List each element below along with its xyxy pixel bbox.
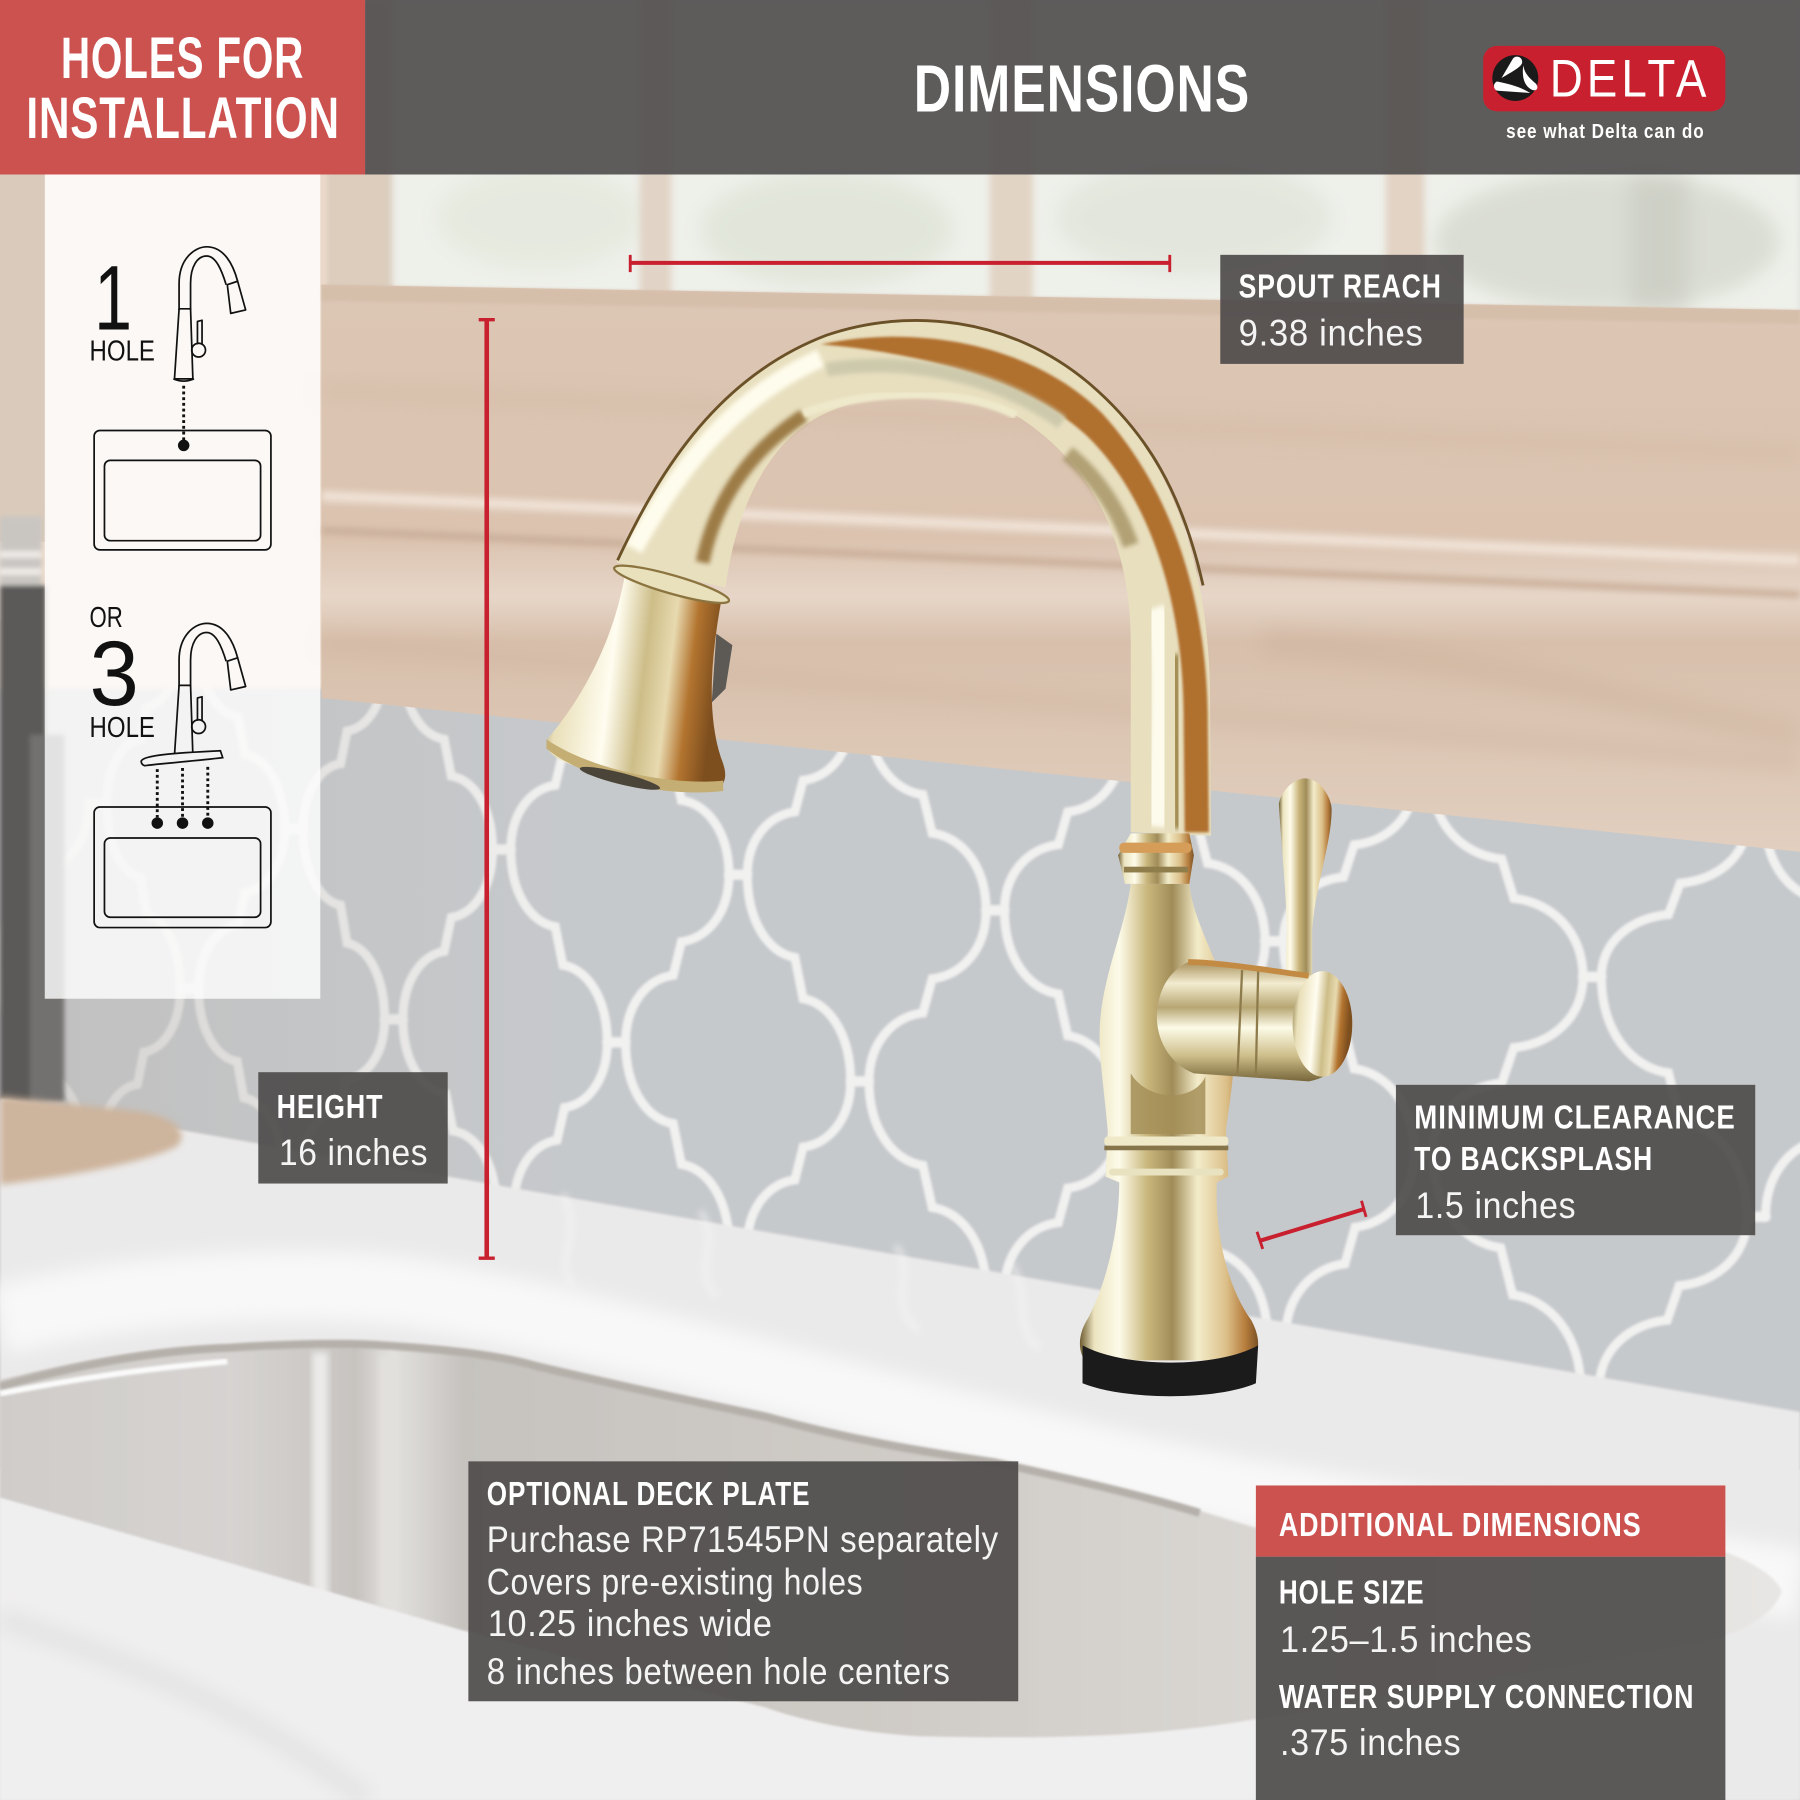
faucet body bbox=[1080, 884, 1258, 1360]
tile backsplash bbox=[0, 620, 1800, 1469]
logo: delta bbox=[1483, 46, 1725, 143]
front countertop bbox=[0, 1498, 1256, 1800]
callout: height: HEIGHT bbox=[277, 1089, 383, 1126]
callout: optional deck plate: Covers pre-existing holes bbox=[487, 1562, 863, 1603]
title: dimensions: DIMENSIONS bbox=[914, 52, 1250, 126]
left wall and window frame bbox=[0, 0, 327, 689]
panel: additional dimensions: .375 inches bbox=[1280, 1722, 1461, 1763]
callout: height: 16 inches bbox=[279, 1132, 428, 1173]
callout: spout reach bbox=[1220, 255, 1464, 364]
wooden cutting board bbox=[0, 1096, 181, 1185]
panel: holes for installation heading: HOLES FOR bbox=[61, 26, 304, 91]
callout: minimum clearance: MINIMUM CLEARANCE bbox=[1414, 1099, 1736, 1136]
panel: additional dimensions: WATER SUPPLY CONNECTION bbox=[1279, 1679, 1694, 1716]
additional dimensions heading: ADDITIONAL DIMENSIONS bbox=[1279, 1507, 1642, 1544]
icon: three hole sink bbox=[94, 767, 271, 928]
callout: minimum clearance: TO BACKSPLASH bbox=[1414, 1141, 1653, 1178]
spray head trigger bbox=[712, 634, 732, 703]
callout: height bbox=[258, 1072, 448, 1184]
marble countertop bbox=[0, 1099, 1800, 1800]
pull-down spray head bbox=[546, 559, 731, 794]
callout: optional deck plate: 8 inches between hole centers bbox=[487, 1651, 951, 1692]
handle lever bbox=[1279, 778, 1332, 973]
icon: delta logo petals bbox=[1494, 57, 1537, 93]
logo: delta: see what Delta can do bbox=[1506, 120, 1705, 143]
callout: spout reach: 9.38 inches bbox=[1239, 313, 1423, 354]
faint tile reflection on counter bbox=[562, 1194, 1039, 1349]
header bar bbox=[365, 0, 1800, 174]
callout: optional deck plate: Purchase RP71545PN separately bbox=[487, 1519, 999, 1560]
collar rings bbox=[1104, 833, 1228, 1176]
panel: hole diagrams bbox=[45, 174, 320, 999]
rounded counter edge above sink bbox=[0, 1286, 1800, 1584]
callout: spout reach: SPOUT REACH bbox=[1239, 268, 1442, 305]
callout: optional deck plate bbox=[468, 1461, 1018, 1701]
or 3 hole label: OR bbox=[90, 602, 123, 634]
icon: single hole faucet bbox=[173, 247, 246, 381]
faucet bbox=[546, 320, 1352, 1396]
numeral 1 hole: HOLE bbox=[90, 335, 155, 367]
icon: one hole sink bbox=[94, 386, 271, 550]
logo: delta: DELTA bbox=[1550, 49, 1710, 108]
panel: holes for installation heading: INSTALLATION bbox=[26, 86, 340, 151]
dimension line: minimum clearance bbox=[1257, 1201, 1366, 1249]
wood cabinet bbox=[321, 285, 1800, 852]
callout: optional deck plate: 10.25 inches wide bbox=[488, 1603, 773, 1644]
window with blurred trees bbox=[0, 0, 1800, 344]
panel: holes for installation heading bbox=[0, 0, 365, 174]
panel: additional dimensions: HOLE SIZE bbox=[1279, 1575, 1425, 1612]
callout: minimum clearance bbox=[1396, 1085, 1755, 1235]
panel: additional dimensions bbox=[1256, 1485, 1725, 1800]
or 3 hole label: 3 bbox=[90, 623, 139, 725]
dimension line: height bbox=[479, 319, 495, 1259]
dimension line: spout reach bbox=[630, 255, 1170, 272]
undermount sink bbox=[0, 1342, 1782, 1738]
handle hub bbox=[1157, 962, 1352, 1081]
dark bottle at left bbox=[0, 517, 64, 1102]
spout arch bbox=[616, 320, 1211, 836]
or 3 hole label: HOLE bbox=[90, 712, 155, 744]
callout: minimum clearance: 1.5 inches bbox=[1415, 1185, 1576, 1226]
or 3 hole label bbox=[90, 602, 155, 744]
additional dimensions heading bbox=[1256, 1485, 1725, 1557]
callout: optional deck plate: OPTIONAL DECK PLATE bbox=[487, 1476, 810, 1513]
icon: faucet with deck plate bbox=[141, 623, 246, 766]
panel: additional dimensions: 1.25–1.5 inches bbox=[1280, 1619, 1533, 1660]
black base gasket bbox=[1083, 1345, 1258, 1396]
numeral 1 hole bbox=[90, 247, 155, 367]
numeral 1 hole: 1 bbox=[94, 247, 132, 349]
